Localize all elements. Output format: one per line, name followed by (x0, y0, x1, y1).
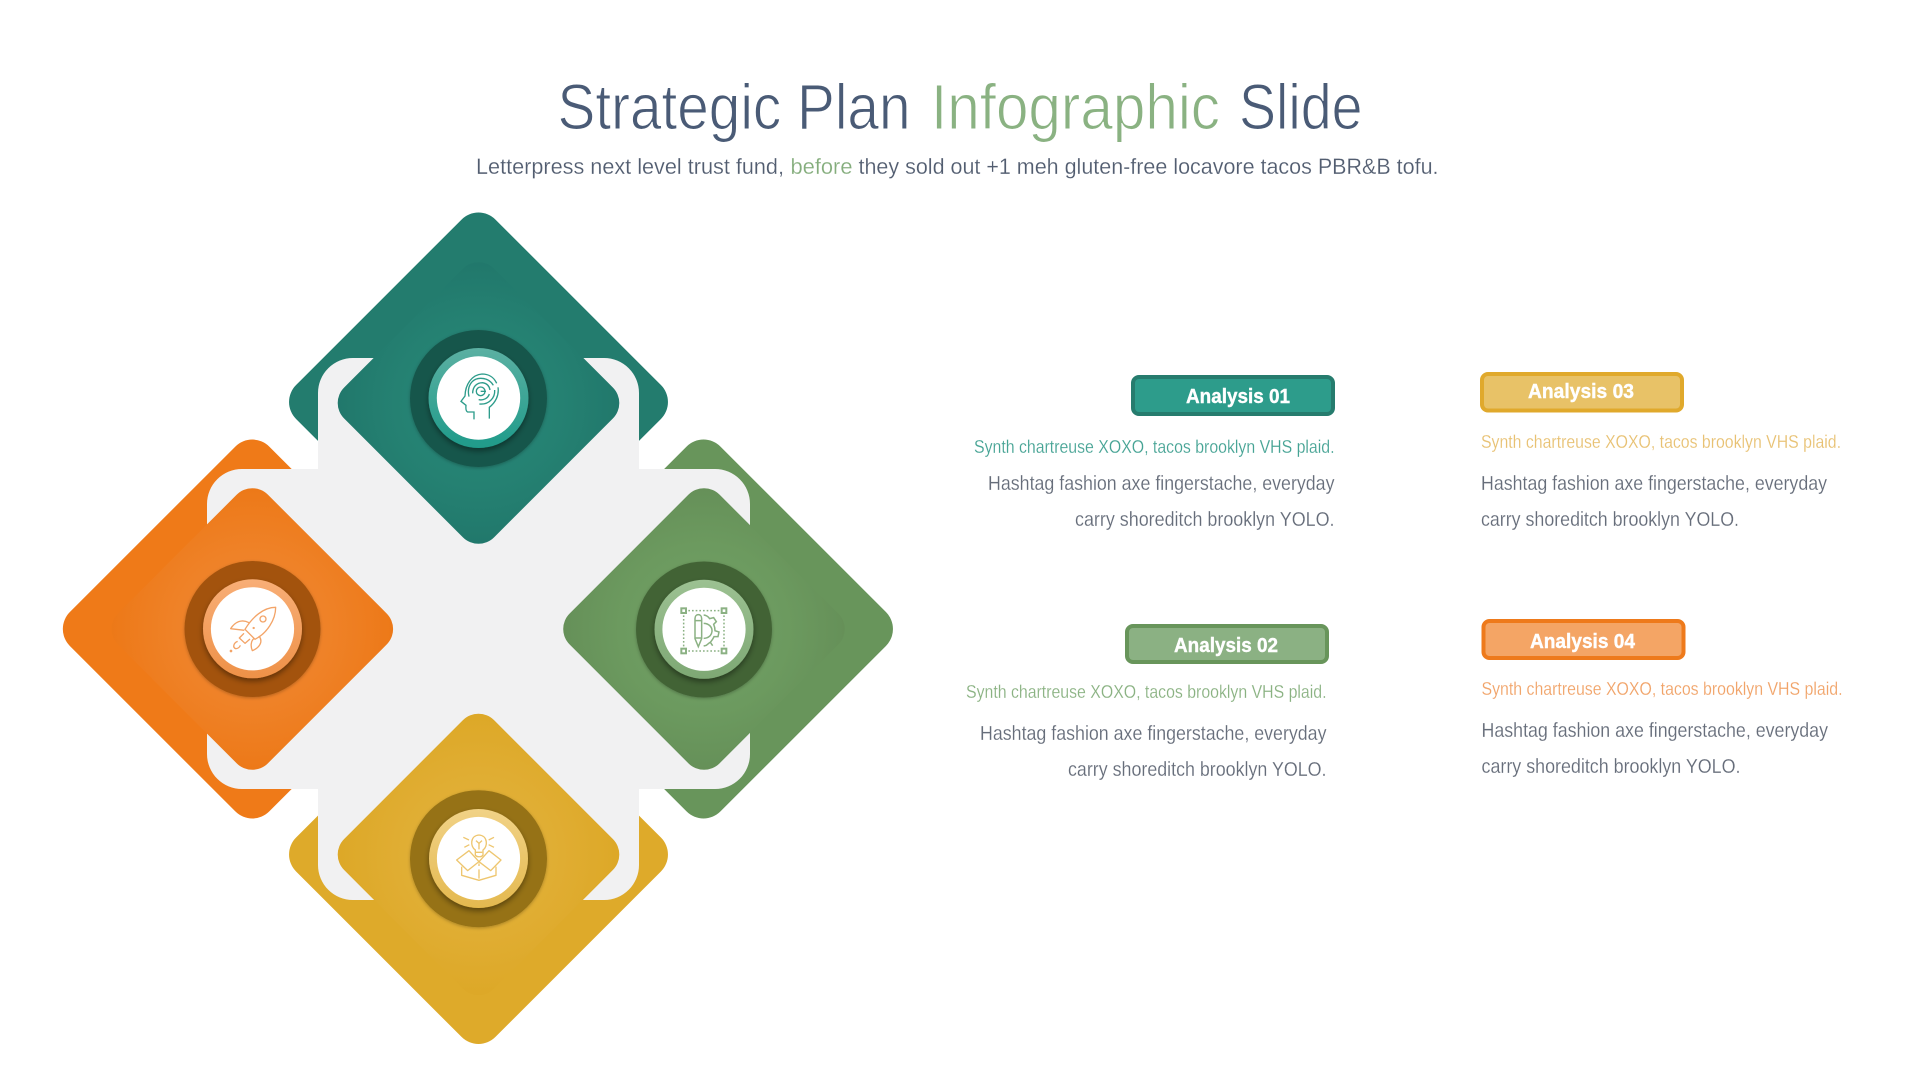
panel: Analysis 02 text: Synth chartreuse XOXO, tacos brooklyn VHS plaid. (966, 681, 1326, 702)
panel: Analysis 01 text: carry shoreditch brooklyn YOLO. (1075, 508, 1334, 531)
subtitle: they sold out +1 meh gluten-free locavore tacos PBR&B tofu. (858, 154, 1438, 179)
panel: green diamond with design icon (554, 479, 854, 779)
outer yellow diamond (279, 655, 678, 1054)
panel: Analysis 03 text (1481, 374, 1841, 531)
outer teal diamond (279, 203, 678, 601)
outer green diamond (504, 430, 903, 828)
title: Infographic (931, 71, 1220, 143)
panel: Analysis 03 text: Hashtag fashion axe fingerstache, everyday (1481, 472, 1828, 495)
panel: Analysis 04 text: Hashtag fashion axe fingerstache, everyday (1482, 719, 1829, 742)
icon: lightbulb over open box (457, 835, 501, 880)
badge: Analysis 02 (1127, 626, 1327, 662)
icon: pencil and gear (681, 608, 726, 653)
panel: Analysis 03 text: Synth chartreuse XOXO, tacos brooklyn VHS plaid. (1481, 431, 1841, 452)
title: Strategic Plan (558, 71, 910, 143)
panel: Analysis 04 text (1482, 621, 1842, 778)
panel: Analysis 02 text: Hashtag fashion axe fingerstache, everyday (980, 722, 1327, 745)
panel: teal diamond with head icon (329, 253, 628, 553)
title: Slide (1239, 71, 1362, 143)
subtitle: Letterpress next level trust fund, (476, 154, 784, 179)
central light grey cross (207, 358, 750, 900)
badge: Analysis 03: Analysis 03 (1528, 380, 1634, 403)
badge: Analysis 04 (1484, 621, 1684, 658)
badge: Analysis 01 (1133, 377, 1333, 414)
icon: head with maze (461, 374, 498, 419)
badge: Analysis 02: Analysis 02 (1174, 634, 1278, 657)
panel: Analysis 01 text (974, 377, 1335, 531)
subtitle: before (790, 154, 852, 179)
outer orange diamond (53, 430, 452, 828)
panel: Analysis 04 text: carry shoreditch brooklyn YOLO. (1482, 755, 1740, 778)
icon: rocket (230, 607, 276, 652)
title (558, 71, 1362, 143)
panel: yellow diamond with lightbulb box icon (329, 705, 628, 1004)
panel: Analysis 02 text (966, 626, 1327, 781)
badge: Analysis 03 (1482, 374, 1682, 410)
panel: orange diamond with rocket icon (102, 479, 402, 779)
panel: Analysis 01 text: Synth chartreuse XOXO, tacos brooklyn VHS plaid. (974, 436, 1334, 457)
panel: Analysis 04 text: Synth chartreuse XOXO, tacos brooklyn VHS plaid. (1482, 678, 1842, 699)
badge: Analysis 01: Analysis 01 (1186, 385, 1290, 408)
badge: Analysis 04: Analysis 04 (1530, 630, 1636, 653)
subtitle (476, 154, 1438, 179)
panel: Analysis 01 text: Hashtag fashion axe fingerstache, everyday (988, 472, 1335, 495)
panel: Analysis 03 text: carry shoreditch brooklyn YOLO. (1481, 508, 1739, 531)
panel: Analysis 02 text: carry shoreditch brooklyn YOLO. (1068, 758, 1326, 781)
